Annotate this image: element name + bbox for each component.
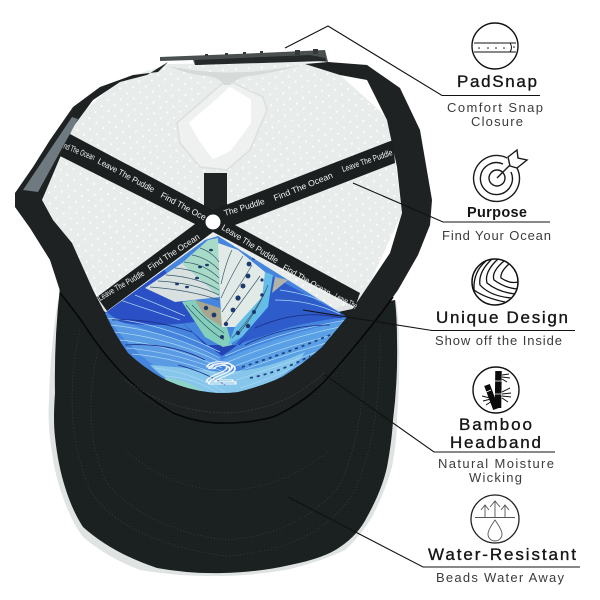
mesh panels xyxy=(42,62,402,320)
logo glyph xyxy=(206,361,237,384)
logo glyph: 2 xyxy=(204,356,235,388)
brim xyxy=(49,287,399,576)
strap text: Find The Ocean xyxy=(281,262,333,298)
text: Natural Moisture Wicking: Wicking xyxy=(469,470,522,485)
text: Natural Moisture Wicking xyxy=(438,456,554,485)
strap text xyxy=(62,141,394,311)
icon: bamboo xyxy=(473,367,519,413)
strap text: nd The Ocean xyxy=(62,141,97,162)
strap text: Leave The Puddle xyxy=(96,268,146,303)
size tag xyxy=(23,117,78,192)
icon: wave lines xyxy=(472,259,518,305)
strap text: Leave The Puddle xyxy=(220,222,281,265)
text: Beads Water Away: Beads Water Away xyxy=(436,570,564,585)
heading: Bamboo Headband: Bamboo xyxy=(459,415,532,434)
text: Comfort Snap Closure: Comfort Snap xyxy=(447,100,543,115)
heading: PadSnap: PadSnap xyxy=(457,72,537,91)
icon: target xyxy=(474,150,527,201)
logo glyph: 2 xyxy=(206,357,239,390)
headband outer ring xyxy=(15,62,432,424)
leader: Purpose xyxy=(353,183,550,222)
strap text: Leave The Puddle xyxy=(96,156,157,194)
strap text: Leave The xyxy=(333,291,359,311)
hat photo xyxy=(15,49,432,576)
leader: Bamboo Headband xyxy=(325,375,555,452)
interior print xyxy=(105,236,346,393)
strap text: Find The Ocean xyxy=(272,170,334,203)
icon: belt strap xyxy=(472,23,518,69)
text: Comfort Snap Closure: Closure xyxy=(471,114,523,129)
strap text: Find The Oce xyxy=(159,190,208,222)
leader: Water-Resistant xyxy=(288,497,580,567)
mesh straps xyxy=(60,134,395,311)
strap text: Leave The Puddle xyxy=(340,147,394,174)
heading: Bamboo Headband xyxy=(450,415,541,452)
heading: Purpose: Purpose xyxy=(467,205,527,221)
icon: water repelling xyxy=(471,495,519,543)
strap text: Find The Ocean xyxy=(146,231,202,273)
text: Comfort Snap Closure xyxy=(447,100,543,129)
text: Show off the Inside: Show off the Inside xyxy=(435,333,562,348)
ponytail opening xyxy=(170,64,305,170)
text: Find Your Ocean: Find Your Ocean xyxy=(442,228,551,243)
leader: Unique Design xyxy=(303,310,575,330)
snap strap xyxy=(160,49,328,65)
heading: Water-Resistant: Water-Resistant xyxy=(428,545,576,564)
text: Natural Moisture Wicking: Natural Moisture xyxy=(438,456,554,471)
strap text: The Puddle xyxy=(223,196,266,218)
heading: Bamboo Headband: Headband xyxy=(450,433,541,452)
leader: PadSnap xyxy=(285,26,540,96)
heading: Unique Design: Unique Design xyxy=(436,308,568,327)
feathers xyxy=(145,263,220,302)
